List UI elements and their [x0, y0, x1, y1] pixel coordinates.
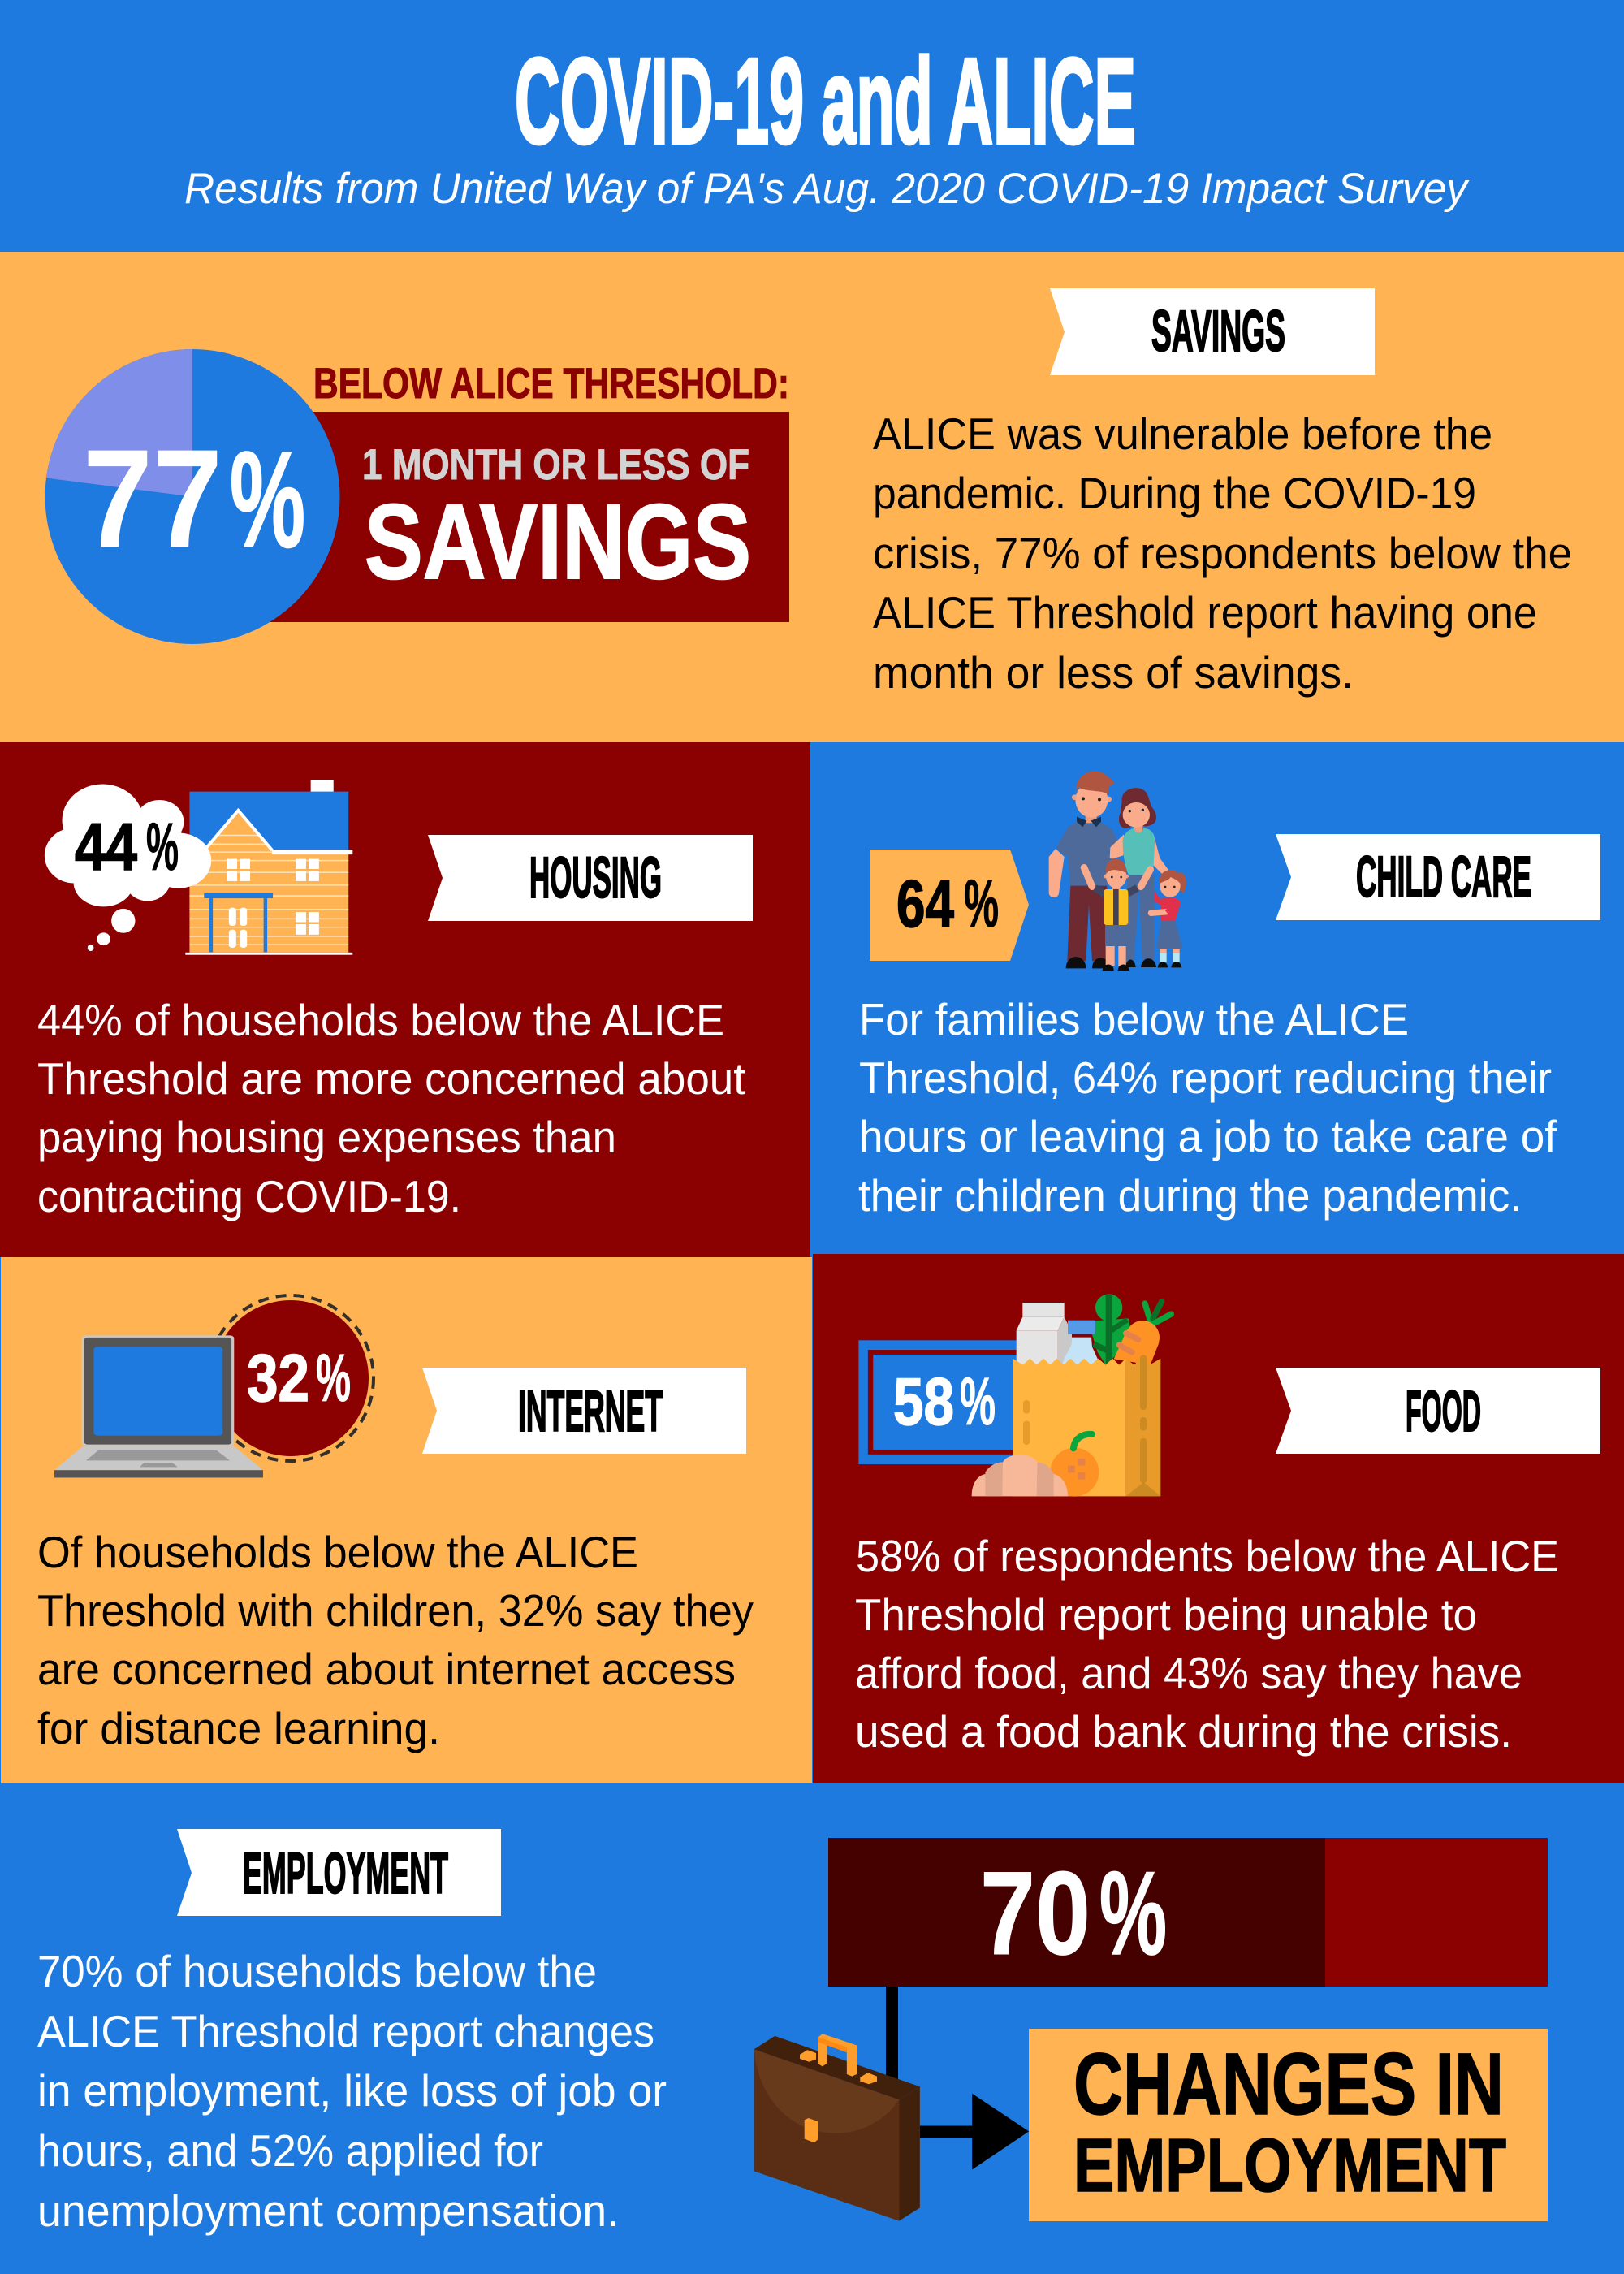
- tag: savings: SAVINGS: [1151, 300, 1285, 364]
- text block: internet: for distance learning.: [37, 1703, 440, 1753]
- big stat: 77%: %: [230, 423, 305, 576]
- tag: employment: EMPLOYMENT: [243, 1842, 448, 1906]
- panel: employment: [0, 1783, 1624, 2274]
- progress bar: 70%: %: [1099, 1847, 1167, 1979]
- tag: food: FOOD: [1406, 1380, 1481, 1444]
- stat: 32%: %: [316, 1340, 351, 1416]
- pie chart: 77%: [45, 349, 339, 644]
- tag: internet: INTERNET: [518, 1380, 663, 1444]
- tag: food: [1276, 1368, 1600, 1454]
- panel: food: [813, 1254, 1624, 1783]
- label: savings: SAVINGS: [365, 482, 751, 601]
- text block: housing: Threshold are more concerned about: [37, 1053, 745, 1104]
- panel: housing: [0, 742, 810, 1257]
- arrow: [920, 2094, 1029, 2169]
- text block: employment: unemployment compensation.: [37, 2185, 619, 2236]
- badge: 64%: %: [964, 866, 999, 941]
- tag: child care: [1276, 834, 1600, 920]
- text block: housing: contracting COVID-19.: [37, 1171, 461, 1221]
- panel: savings: [0, 252, 1624, 742]
- stat: 32%: 32: [247, 1340, 309, 1416]
- progress bar: 70%: 70: [980, 1847, 1091, 1979]
- text block: employment: hours, and 52% applied for: [37, 2125, 543, 2176]
- label: 1 month or less of: 1 MONTH OR LESS OF: [362, 441, 749, 489]
- icon: house: [185, 780, 352, 955]
- savings maroon banner: [244, 412, 789, 622]
- stat: 44%: %: [146, 809, 179, 884]
- text block: food: Threshold report being unable to: [855, 1589, 1477, 1640]
- badge: 58%: [858, 1340, 1017, 1464]
- text block: child care: For families below the ALICE: [859, 994, 1409, 1044]
- badge: 64%: [870, 850, 1029, 961]
- tag: internet: [422, 1368, 746, 1454]
- text block: food: afford food, and 43% say they have: [855, 1648, 1522, 1698]
- text block: food: [855, 1531, 1559, 1757]
- stat: 44%: 44: [75, 809, 137, 884]
- text block: child care: hours or leaving a job to take care of: [859, 1111, 1557, 1161]
- icon: grocery bag: [972, 1294, 1171, 1497]
- tag: employment: [177, 1829, 501, 1916]
- badge: 58%: %: [960, 1364, 996, 1439]
- text block: child care: their children during the pandemic.: [858, 1170, 1522, 1221]
- panel: header: [0, 0, 1624, 252]
- panel: internet: [1, 1257, 812, 1783]
- text block: savings: ALICE was vulnerable before the: [873, 409, 1492, 459]
- text block: housing: paying housing expenses than: [37, 1112, 616, 1162]
- callout: changes in employment: [1029, 2029, 1548, 2221]
- text block: housing: 44% of households below the ALICE: [37, 995, 724, 1045]
- text block: child care: Threshold, 64% report reducing their: [859, 1053, 1552, 1103]
- connector line: [886, 1987, 898, 2084]
- text block: employment: 70% of households below the: [37, 1946, 597, 1996]
- panel: child care: [810, 742, 1624, 1254]
- badge: 58%: 58: [893, 1364, 954, 1439]
- callout: changes in employment: EMPLOYMENT: [1073, 2123, 1506, 2207]
- text block: employment: ALICE Threshold report changes: [37, 2006, 654, 2056]
- label: below ALICE threshold: BELOW ALICE THRESHOLD:: [313, 360, 789, 408]
- text block: food: 58% of respondents below the ALICE: [856, 1531, 1559, 1581]
- text block: food: used a food bank during the crisis.: [855, 1706, 1512, 1757]
- big stat: 77%: [83, 421, 305, 577]
- text block: savings: pandemic. During the COVID-19: [873, 468, 1476, 518]
- text block: internet: are concerned about internet access: [37, 1644, 736, 1694]
- text block: savings: crisis, 77% of respondents below the: [873, 528, 1572, 578]
- text block: housing: [37, 995, 745, 1221]
- tag: housing: HOUSING: [529, 846, 662, 910]
- text block: internet: Threshold with children, 32% say they: [37, 1585, 754, 1636]
- icon: briefcase: [754, 2034, 920, 2221]
- stat circle: 32%: [208, 1295, 374, 1461]
- text block: employment: in employment, like loss of job or: [37, 2065, 667, 2116]
- text block: employment: [37, 1946, 667, 2236]
- text block: internet: Of households below the ALICE: [37, 1527, 638, 1577]
- text block: savings: ALICE Threshold report having one: [873, 587, 1537, 638]
- tag: housing: [428, 835, 753, 921]
- icon: laptop: [54, 1335, 263, 1477]
- subtitle: Results from United Way of PA's Aug. 2020 COVID-19 Impact Survey: [184, 165, 1470, 213]
- badge: 64%: 64: [896, 866, 954, 941]
- icon: family: [1049, 771, 1186, 971]
- icon: thought bubble: [45, 785, 211, 951]
- text block: child care: [858, 994, 1557, 1221]
- callout: changes in employment: CHANGES IN: [1073, 2034, 1504, 2133]
- text block: savings: month or less of savings.: [873, 647, 1354, 698]
- text block: internet: [37, 1527, 754, 1753]
- progress bar: 70%: [828, 1838, 1548, 1987]
- big stat: 77%: 77: [83, 421, 222, 577]
- text block: savings: [873, 409, 1572, 698]
- tag: savings: [1050, 288, 1375, 375]
